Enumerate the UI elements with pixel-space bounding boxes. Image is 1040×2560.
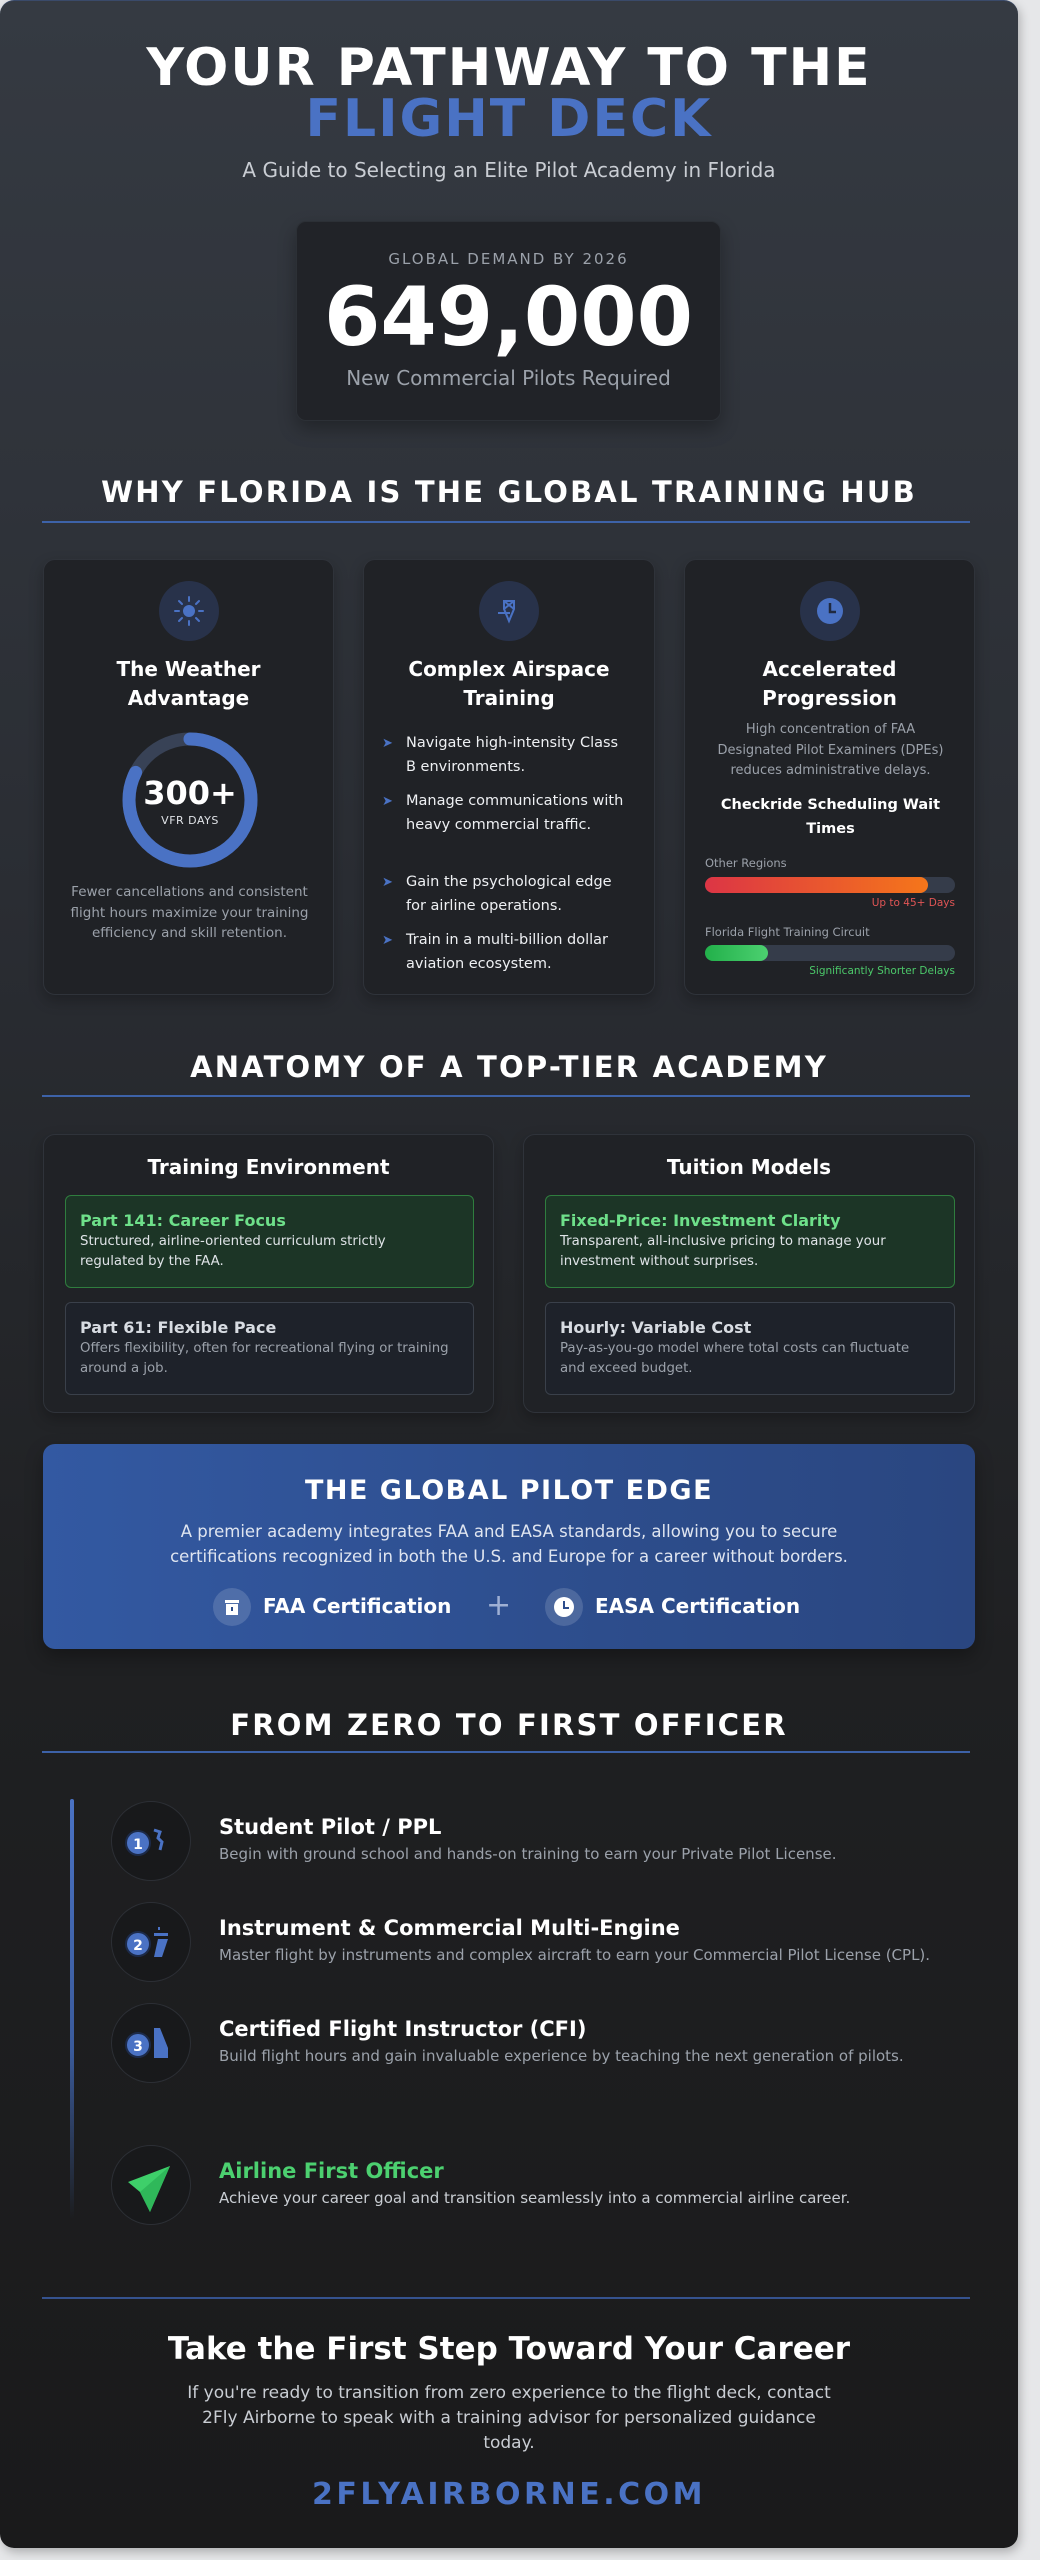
donut chart: 300+ VFR days: VFR DAYS (161, 814, 219, 827)
option: fixed price (545, 1195, 955, 1288)
donut chart: 300+ VFR days (122, 732, 258, 868)
panel title: Training Environment (147, 1155, 390, 1179)
panel heading: THE GLOBAL PILOT EDGE (305, 1475, 713, 1506)
panel: global pilot edge (43, 1444, 975, 1649)
step 2: Master flight by instruments and complex aircraft to earn your Commercial Pilot License (CPL). (219, 1946, 930, 1964)
title (146, 38, 872, 149)
description: High concentration of FAA Designated Pilot Examiners (DPEs) reduces administrative delays. (718, 722, 943, 778)
panel title: Tuition Models (667, 1155, 831, 1179)
bullet list: ➤ (382, 736, 393, 751)
donut chart: 300+ VFR days: 300+ (143, 774, 237, 812)
certifications row (213, 1588, 800, 1626)
certifications row: EASA Certification (595, 1594, 800, 1618)
bullet list: ➤ (382, 933, 393, 948)
option: fixed price: Fixed-Price: Investment Clarity (560, 1211, 840, 1230)
bar chart: wait times: Significantly Shorter Delays (809, 965, 955, 977)
step 3 (111, 2003, 904, 2083)
subtitle: A Guide to Selecting an Elite Pilot Academy in Florida (242, 158, 776, 182)
step 3: Build flight hours and gain invaluable experience by teaching the next generation of pilots. (219, 2047, 904, 2065)
timeline line (70, 1799, 74, 2219)
bullet list: Navigate high-intensity Class B environments. (406, 735, 618, 774)
option: part 61 (65, 1302, 474, 1395)
bar chart: wait times (705, 797, 955, 977)
panel text: A premier academy integrates FAA and EASA standards, allowing you to secure certifications recognized in both the U.S. and Europe for a career without borders. (170, 1522, 848, 1566)
step 1 (111, 1801, 837, 1881)
stat label: GLOBAL DEMAND BY 2026 (388, 250, 629, 268)
bar chart: wait times: Florida Flight Training Circuit (705, 925, 870, 939)
step 2 (111, 1902, 930, 1982)
option: part 141: Part 141: Career Focus (80, 1211, 286, 1230)
option: fixed price: Transparent, all-inclusive pricing to manage your investment without surprises. (560, 1234, 886, 1269)
icon: clock (800, 581, 860, 641)
card: weather advantage (43, 559, 334, 995)
stat box: global demand (296, 221, 721, 421)
card title: Progression (762, 686, 897, 710)
step 3: Certified Flight Instructor (CFI) (219, 2017, 586, 2041)
bullet list: Gain the psychological edge for airline operations. (406, 874, 612, 914)
card title (408, 657, 610, 710)
icon: EASA (545, 1588, 583, 1626)
option: part 141: Structured, airline-oriented curriculum strictly regulated by the FAA. (80, 1234, 386, 1269)
panel: tuition models (523, 1134, 975, 1413)
option: hourly (545, 1302, 955, 1395)
bullet list: ➤ (382, 875, 393, 890)
stat number: 649,000 (324, 271, 693, 365)
bullet list: Train in a multi-billion dollar aviation ecosystem. (406, 932, 608, 972)
bullet list: ➤ (382, 794, 393, 809)
heading: why florida: WHY FLORIDA IS THE GLOBAL TRAINING HUB (101, 475, 917, 509)
bar chart: wait times: Other Regions (705, 856, 787, 870)
CTA text: If you're ready to transition from zero experience to the flight deck, contact 2Fly Airborne to speak with a training advisor for personalized guidance today. (187, 2383, 831, 2453)
icon: FAA (213, 1588, 251, 1626)
step 4: Achieve your career goal and transition seamlessly into a commercial airline career. (219, 2189, 850, 2207)
card title: Advantage (128, 686, 249, 710)
panel: training environment (43, 1134, 494, 1413)
option: hourly: Pay-as-you-go model where total costs can fluctuate and exceed budget. (560, 1341, 909, 1376)
card title: The Weather (116, 657, 261, 681)
step 2: 2 (133, 1938, 143, 1954)
option: hourly: Hourly: Variable Cost (560, 1318, 751, 1337)
caption: Fewer cancellations and consistent flight hours maximize your training efficiency and skill retention. (71, 884, 308, 941)
CTA heading: Take the First Step Toward Your Career (168, 2331, 850, 2367)
card title: Complex Airspace (408, 657, 610, 681)
card: complex airspace (363, 559, 655, 995)
step 4: Airline First Officer (219, 2159, 444, 2183)
certifications row: + (486, 1588, 511, 1623)
card: accelerated progression (684, 559, 975, 995)
step 1: Begin with ground school and hands-on training to earn your Private Pilot License. (219, 1845, 837, 1863)
card title: Training (463, 686, 555, 710)
bullet list: Manage communications with heavy commercial traffic. (406, 793, 623, 832)
step 1: Student Pilot / PPL (219, 1815, 441, 1839)
icon: sun (158, 581, 218, 641)
heading: anatomy: ANATOMY OF A TOP-TIER ACADEMY (190, 1050, 828, 1084)
option: part 141 (65, 1195, 474, 1288)
step 1: 1 (133, 1837, 143, 1853)
certifications row: FAA Certification (263, 1594, 451, 1618)
option: part 61: Part 61: Flexible Pace (80, 1318, 276, 1337)
website url: 2FLYAIRBORNE.COM (312, 2477, 706, 2512)
bar chart: wait times: Checkride Scheduling Wait Times (721, 797, 940, 837)
card title (116, 657, 261, 710)
step 4 (111, 2145, 850, 2225)
heading: zero to first officer: FROM ZERO TO FIRST OFFICER (230, 1708, 788, 1742)
bullet list (382, 735, 623, 972)
icon: tower (479, 581, 539, 641)
stat caption: New Commercial Pilots Required (346, 366, 671, 390)
option: part 61: Offers flexibility, often for recreational flying or training around a job. (80, 1341, 449, 1376)
title: YOUR PATHWAY TO THE (146, 38, 872, 98)
step 3: 3 (133, 2039, 143, 2055)
bar chart: wait times: Up to 45+ Days (872, 897, 955, 909)
card title (762, 657, 897, 710)
title: FLIGHT DECK (306, 89, 712, 149)
step 2: Instrument & Commercial Multi-Engine (219, 1916, 680, 1940)
card title: Accelerated (762, 657, 896, 681)
